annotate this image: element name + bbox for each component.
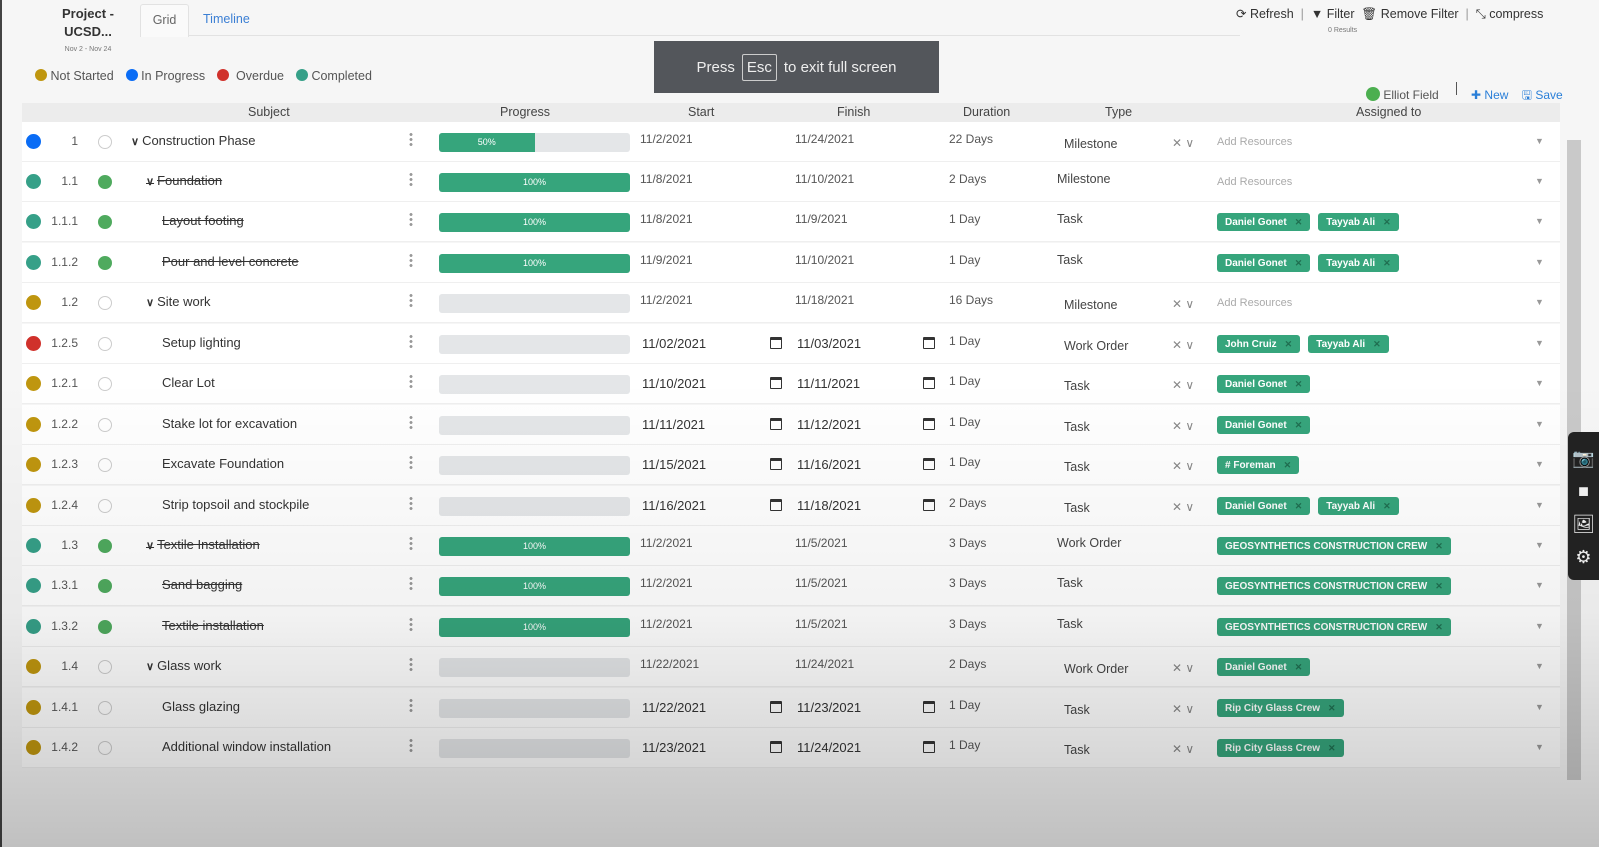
- row 1.2.1: Task: [1064, 379, 1090, 393]
- row 1.1.2: 11/10/2021: [795, 253, 854, 267]
- row 1.4: [22, 647, 1560, 687]
- row 1.2: ✕ ∨: [1172, 297, 1194, 311]
- row 1.2.4: Strip topsoil and stockpile: [162, 497, 309, 512]
- table header: Subject: [248, 105, 290, 119]
- row 1.2.4: ▼: [1535, 500, 1544, 510]
- project title: UCSD...: [64, 24, 112, 39]
- row 1.4.2: [22, 728, 1560, 768]
- table header: Finish: [837, 105, 870, 119]
- row 1.2.1: 11/11/2021: [797, 376, 860, 391]
- row 1.4.2: ✕ ∨: [1172, 742, 1194, 756]
- row 1.1.2: ▼: [1535, 257, 1544, 267]
- row 1.2.1: Daniel Gonet ✕: [1225, 379, 1302, 390]
- tab: grid: [140, 4, 189, 37]
- row 1.3.1: 11/5/2021: [795, 576, 848, 590]
- row 1.2.1: 11/10/2021: [642, 376, 706, 391]
- row 1.1: 2 Days: [949, 172, 986, 186]
- row 1.4: ▼: [1535, 661, 1544, 671]
- row 1.3.2: 3 Days: [949, 617, 986, 631]
- row 1.2.1: [22, 364, 1560, 404]
- row 1.2.3: # Foreman ✕: [1225, 460, 1291, 471]
- row 1.2.2: Daniel Gonet ✕: [1225, 420, 1302, 431]
- row 1.2.5: ▼: [1535, 338, 1544, 348]
- row 1.2: 16 Days: [949, 293, 993, 307]
- row 1.1.1: ▼: [1535, 216, 1544, 226]
- row 1.3.2: Textile installation: [162, 618, 264, 633]
- row 1.1.1: Daniel Gonet ✕: [1225, 217, 1302, 228]
- row 1.2.4: ✕ ∨: [1172, 500, 1194, 514]
- row 1.2.3: ✕ ∨: [1172, 459, 1194, 473]
- row 1.3.2: 1.3.2: [51, 619, 78, 633]
- fullscreen notice: Esc: [747, 58, 772, 76]
- row 1.4.1: ✕ ∨: [1172, 702, 1194, 716]
- row 1.2.2: 1.2.2: [51, 417, 78, 431]
- row 1.4.2: 1.4.2: [51, 740, 78, 754]
- row 1.2.5: ✕ ∨: [1172, 338, 1194, 352]
- row 1.3: 3 Days: [949, 536, 986, 550]
- row 1.3.1: GEOSYNTHETICS CONSTRUCTION CREW ✕: [1225, 581, 1443, 592]
- row 1.1: Add Resources: [1217, 176, 1292, 188]
- row 1.2: ∨Site work: [146, 294, 211, 309]
- row 1.1.1: [22, 202, 1560, 242]
- row 1.1: 100%: [523, 177, 546, 187]
- row 1: ▼: [1535, 136, 1544, 146]
- row 1.1.1: Layout footing: [162, 213, 244, 228]
- row 1.2: 11/2/2021: [640, 293, 692, 307]
- row 1.3: ∨Textile Installation: [146, 537, 260, 552]
- row 1.2.4: Daniel Gonet ✕: [1225, 501, 1302, 512]
- row 1.3.2: [22, 607, 1560, 647]
- row 1.2.3: 1.2.3: [51, 457, 78, 471]
- row 1.2.5: Tayyab Ali ✕: [1316, 339, 1381, 350]
- row 1.2.5: 1.2.5: [51, 336, 78, 350]
- row 1.2.5: [22, 324, 1560, 364]
- row 1.3.2: ▼: [1535, 621, 1544, 631]
- fullscreen notice: [654, 41, 939, 93]
- row 1.2.3: ▼: [1535, 459, 1544, 469]
- row 1.3.1: 100%: [523, 581, 546, 591]
- bottom vignette: [0, 380, 1599, 847]
- row 1.2.5: 11/02/2021: [642, 336, 706, 351]
- row 1.3.2: 11/5/2021: [795, 617, 848, 631]
- row 1.2.2: 11/12/2021: [797, 417, 861, 432]
- row 1.3.1: 1.3.1: [51, 578, 78, 592]
- tab: timeline: Timeline: [203, 12, 250, 26]
- row 1: [22, 122, 1560, 162]
- row 1.4.1: Task: [1064, 703, 1090, 717]
- row 1.2: 1.2: [61, 295, 78, 309]
- row 1.2.5: 11/03/2021: [797, 336, 861, 351]
- row 1.4.2: Additional window installation: [162, 739, 331, 754]
- row 1.2.5: Setup lighting: [162, 335, 241, 350]
- row 1.1.2: Daniel Gonet ✕: [1225, 258, 1302, 269]
- fullscreen notice: Press to exit full screen: [697, 58, 896, 76]
- row 1.1: ∨Foundation: [146, 173, 222, 188]
- row 1.1.1: 1.1.1: [51, 214, 78, 228]
- row 1.4.2: 11/23/2021: [642, 740, 706, 755]
- row 1.1.2: 1.1.2: [51, 255, 78, 269]
- row 1.3.1: ▼: [1535, 580, 1544, 590]
- row 1.4.2: ▼: [1535, 742, 1544, 752]
- row 1.3: Work Order: [1057, 536, 1121, 550]
- row 1.2.1: Clear Lot: [162, 375, 215, 390]
- row 1.2.4: 11/16/2021: [642, 498, 706, 513]
- table header: Type: [1105, 105, 1132, 119]
- table header: Duration: [963, 105, 1010, 119]
- row 1.2.2: Task: [1064, 420, 1090, 434]
- project title: [62, 6, 114, 53]
- row 1.3.2: 100%: [523, 622, 546, 632]
- row 1.4: Work Order: [1064, 662, 1128, 676]
- row 1.4: 2 Days: [949, 657, 986, 671]
- row 1.2.1: ▼: [1535, 378, 1544, 388]
- toolbar: 0 Results: [1328, 27, 1357, 34]
- legend: Overdue: [236, 69, 284, 83]
- row 1.2.4: 11/18/2021: [797, 498, 861, 513]
- row 1.2.4: Task: [1064, 501, 1090, 515]
- row 1.4: ∨Glass work: [146, 658, 221, 673]
- row 1.4.1: ▼: [1535, 702, 1544, 712]
- row 1.1.2: Pour and level concrete: [162, 254, 299, 269]
- row 1.2.3: Task: [1064, 460, 1090, 474]
- toolbar: ⟳ Refresh | ▼ Filter 🗑 Remove Filter | ⤡ compress: [1236, 7, 1543, 21]
- row 1: 22 Days: [949, 132, 993, 146]
- legend: [35, 69, 372, 83]
- row 1: ∨Construction Phase: [131, 133, 256, 148]
- row 1.4.1: 11/23/2021: [797, 700, 861, 715]
- row 1: Add Resources: [1217, 136, 1292, 148]
- legend: Completed: [311, 69, 372, 83]
- row 1.3: 1.3: [61, 538, 78, 552]
- row 1.3: ▼: [1535, 540, 1544, 550]
- tabs: [140, 4, 1240, 36]
- row 1.1: 11/8/2021: [640, 172, 692, 186]
- row 1.3.2: Task: [1057, 617, 1083, 631]
- row 1.1.2: [22, 243, 1560, 283]
- row 1.2: [22, 283, 1560, 323]
- table header: Assigned to: [1356, 105, 1421, 119]
- row 1.2.3: 1 Day: [949, 455, 980, 469]
- row 1.1.2: Task: [1057, 253, 1083, 267]
- row 1.2: 11/18/2021: [795, 293, 854, 307]
- row 1.4.1: Rip City Glass Crew ✕: [1225, 703, 1336, 714]
- side toolbar icons: 📷: [1572, 448, 1595, 468]
- row 1.2: ▼: [1535, 297, 1544, 307]
- row 1.1: 1.1: [61, 174, 78, 188]
- row 1.3.1: [22, 566, 1560, 606]
- table header: Progress: [500, 105, 550, 119]
- row 1.2.2: 1 Day: [949, 415, 980, 429]
- row 1.4: ✕ ∨: [1172, 661, 1194, 675]
- legend: In Progress: [141, 69, 205, 83]
- side toolbar icons: ⚙: [1575, 547, 1592, 567]
- legend: Not Started: [50, 69, 114, 83]
- row 1.1.2: 100%: [523, 258, 546, 268]
- row 1.1: Milestone: [1057, 172, 1110, 186]
- row 1.3.1: Sand bagging: [162, 577, 242, 592]
- project title: Nov 2 - Nov 24: [65, 46, 111, 53]
- side toolbar icons: [1568, 432, 1599, 580]
- table header: Start: [688, 105, 714, 119]
- row 1.3: 11/2/2021: [640, 536, 692, 550]
- row 1.4.1: 11/22/2021: [642, 700, 706, 715]
- row 1.3.1: 11/2/2021: [640, 576, 692, 590]
- user and actions: [1366, 82, 1563, 102]
- row 1.3.1: 3 Days: [949, 576, 986, 590]
- row 1.3.1: Task: [1057, 576, 1083, 590]
- row 1.3.2: 11/2/2021: [640, 617, 692, 631]
- row 1.2.3: 11/16/2021: [797, 457, 861, 472]
- toolbar: [1236, 7, 1543, 34]
- row 1: 50%: [478, 137, 496, 147]
- row 1.2.1: 1.2.1: [51, 376, 78, 390]
- row 1.3: 11/5/2021: [795, 536, 848, 550]
- row 1.2.2: 11/11/2021: [642, 417, 705, 432]
- row 1.2.4: 1.2.4: [51, 498, 78, 512]
- table header: [22, 103, 1560, 122]
- tab: grid: Grid: [153, 13, 176, 27]
- row 1.2.3: [22, 445, 1560, 485]
- row 1.2: Milestone: [1064, 298, 1118, 312]
- row 1.1.2: 1 Day: [949, 253, 980, 267]
- row 1.1.1: 100%: [523, 217, 546, 227]
- row 1.4: 11/22/2021: [640, 657, 699, 671]
- row 1.4.1: [22, 688, 1560, 728]
- row 1.1: 11/10/2021: [795, 172, 854, 186]
- row 1.4.1: 1 Day: [949, 698, 980, 712]
- row 1.2.2: [22, 405, 1560, 445]
- row 1: ✕ ∨: [1172, 136, 1194, 150]
- row 1.2.4: [22, 486, 1560, 526]
- row 1.4: Daniel Gonet ✕: [1225, 662, 1302, 673]
- row 1.2.2: ▼: [1535, 419, 1544, 429]
- row 1.4.2: Task: [1064, 743, 1090, 757]
- project title: Project -: [62, 6, 114, 21]
- row 1: 1: [71, 134, 78, 148]
- row 1.4.2: 1 Day: [949, 738, 980, 752]
- left border: [0, 0, 2, 847]
- row 1.2.5: Work Order: [1064, 339, 1128, 353]
- row 1.2.4: Tayyab Ali ✕: [1326, 501, 1391, 512]
- side toolbar icons: 🖼: [1572, 514, 1595, 534]
- row 1.1.1: Tayyab Ali ✕: [1326, 217, 1391, 228]
- row 1.2.2: Stake lot for excavation: [162, 416, 297, 431]
- user and actions: Elliot Field ✚ New 🖫 Save: [1383, 88, 1563, 102]
- row 1.1.1: 1 Day: [949, 212, 980, 226]
- row 1.4.1: 1.4.1: [51, 700, 78, 714]
- row 1.2.1: ✕ ∨: [1172, 378, 1194, 392]
- row 1.2.5: 1 Day: [949, 334, 980, 348]
- row 1.1: [22, 162, 1560, 202]
- row 1.1.1: Task: [1057, 212, 1083, 226]
- row 1.3.2: GEOSYNTHETICS CONSTRUCTION CREW ✕: [1225, 622, 1443, 633]
- row 1.2.3: Excavate Foundation: [162, 456, 284, 471]
- row 1.1: ▼: [1535, 176, 1544, 186]
- row 1.4.1: Glass glazing: [162, 699, 240, 714]
- row 1.4.2: 11/24/2021: [797, 740, 861, 755]
- row 1.2.5: John Cruiz ✕: [1225, 339, 1292, 350]
- row 1: 11/24/2021: [795, 132, 854, 146]
- row 1.2.3: 11/15/2021: [642, 457, 706, 472]
- row 1: 11/2/2021: [640, 132, 692, 146]
- row 1.1.2: Tayyab Ali ✕: [1326, 258, 1391, 269]
- side toolbar icons: ■: [1578, 481, 1589, 501]
- row 1.1.2: 11/9/2021: [640, 253, 692, 267]
- row 1.1.1: 11/8/2021: [640, 212, 692, 226]
- row 1.4.2: Rip City Glass Crew ✕: [1225, 743, 1336, 754]
- row 1.2.2: ✕ ∨: [1172, 419, 1194, 433]
- row 1.2: Add Resources: [1217, 297, 1292, 309]
- row 1.3: GEOSYNTHETICS CONSTRUCTION CREW ✕: [1225, 541, 1443, 552]
- row 1.3: [22, 526, 1560, 566]
- row 1.1.1: 11/9/2021: [795, 212, 848, 226]
- row 1.3: 100%: [523, 541, 546, 551]
- scrollbar: [1567, 140, 1581, 780]
- row 1.2.1: 1 Day: [949, 374, 980, 388]
- row 1.4: 11/24/2021: [795, 657, 854, 671]
- row 1.2.4: 2 Days: [949, 496, 986, 510]
- row 1: Milestone: [1064, 137, 1118, 151]
- row 1.4: 1.4: [61, 659, 78, 673]
